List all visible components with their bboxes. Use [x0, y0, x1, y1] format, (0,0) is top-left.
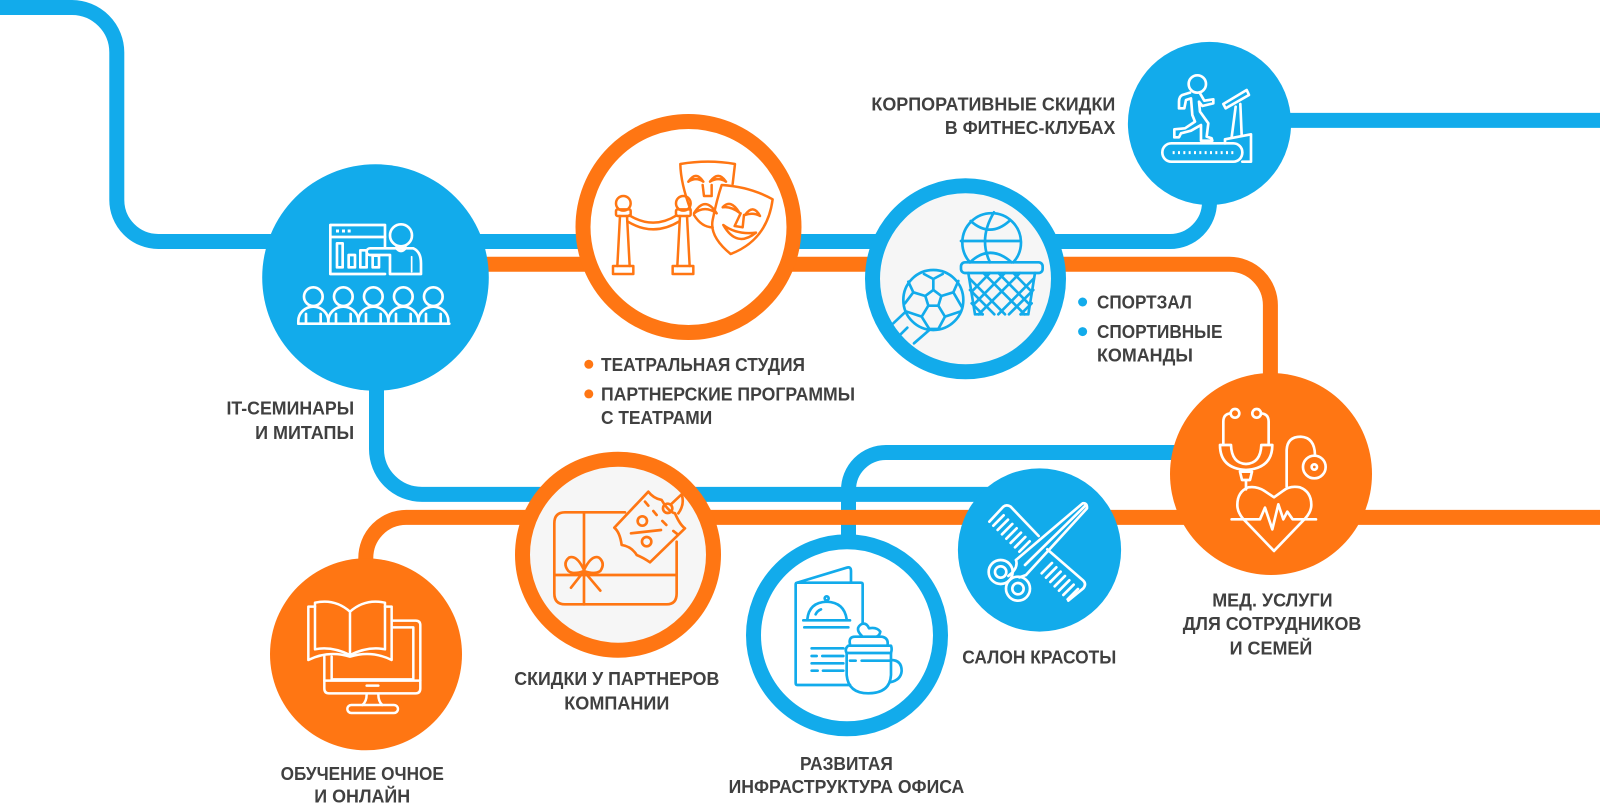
- label: IT seminars: [226, 399, 354, 443]
- label: IT seminars: И МИТАПЫ: [255, 423, 354, 443]
- label: fitness discounts: [871, 95, 1115, 138]
- bullet: theatre programs: [584, 389, 593, 398]
- label: fitness discounts: КОРПОРАТИВНЫЕ СКИДКИ: [871, 95, 1115, 115]
- circle: theatre: [583, 122, 794, 332]
- circle: partner discounts: [522, 459, 714, 650]
- label: medical services: [1183, 590, 1361, 658]
- bullet: sports gym: [1078, 298, 1087, 306]
- blue route from office to medical: [848, 452, 1220, 570]
- icon: menu and cup: [796, 567, 902, 693]
- bullet: theatre studio: [584, 360, 593, 369]
- circle: beauty salon: [958, 468, 1121, 632]
- icon: basketball, hoop and soccer ball: [893, 212, 1043, 343]
- label: office infrastructure: РАЗВИТАЯ: [800, 754, 893, 774]
- bullet: sports teams: [1078, 327, 1087, 336]
- label: sports list: СПОРТИВНЫЕ: [1097, 322, 1222, 342]
- label: partner discounts: СКИДКИ У ПАРТНЕРОВ: [514, 669, 719, 689]
- icon: book and monitor: [308, 602, 420, 713]
- icon: stethoscope and heart: [1220, 409, 1326, 551]
- label: sports list: КОМАНДЫ: [1097, 346, 1193, 366]
- blue route top right: [1260, 113, 1600, 128]
- label: medical services: МЕД. УСЛУГИ: [1212, 590, 1333, 610]
- circle: sports: [872, 186, 1058, 372]
- label: theatre list: ПАРТНЕРСКИЕ ПРОГРАММЫ: [601, 384, 855, 404]
- circle: treadmill: [1128, 42, 1291, 205]
- label: medical services: ДЛЯ СОТРУДНИКОВ: [1183, 614, 1361, 634]
- label: sports list: СПОРТЗАЛ: [1097, 292, 1192, 312]
- label: theatre list: ТЕАТРАЛЬНАЯ СТУДИЯ: [601, 355, 805, 375]
- label: theatre list: С ТЕАТРАМИ: [601, 408, 712, 428]
- label: partner discounts: КОМПАНИИ: [564, 694, 669, 714]
- label: IT seminars: IT-СЕМИНАРЫ: [226, 399, 354, 419]
- blue route lower from seminar circle: [376, 370, 1010, 494]
- circle: medical: [1170, 373, 1372, 575]
- icon: masks and rope barrier: [613, 162, 773, 274]
- orange route lower: [366, 517, 1600, 590]
- icon: presenter and audience: [298, 224, 449, 324]
- icon: comb and scissors: [989, 503, 1087, 601]
- label: education: ОБУЧЕНИЕ ОЧНОЕ: [281, 764, 444, 784]
- orange route upper: [440, 264, 1270, 400]
- blue route top left: [0, 8, 1210, 242]
- label: medical services: И СЕМЕЙ: [1230, 638, 1312, 658]
- label: office infrastructure: [729, 754, 964, 797]
- icon: gift card with discount tag: [554, 492, 685, 604]
- label: sports list: [1097, 292, 1222, 366]
- label: theatre list: [601, 355, 855, 428]
- circle: education: [270, 558, 462, 750]
- circle: IT seminars: [262, 164, 489, 391]
- icon: person on treadmill: [1162, 75, 1251, 162]
- label: partner discounts: [514, 669, 719, 714]
- label: education: [281, 764, 444, 803]
- label: office infrastructure: ИНФРАСТРУКТУРА ОФИСА: [729, 777, 964, 797]
- circle: office infrastructure: [754, 542, 940, 729]
- label: fitness discounts: В ФИТНЕС-КЛУБАХ: [945, 118, 1115, 138]
- label: beauty salon: САЛОН КРАСОТЫ: [962, 648, 1116, 668]
